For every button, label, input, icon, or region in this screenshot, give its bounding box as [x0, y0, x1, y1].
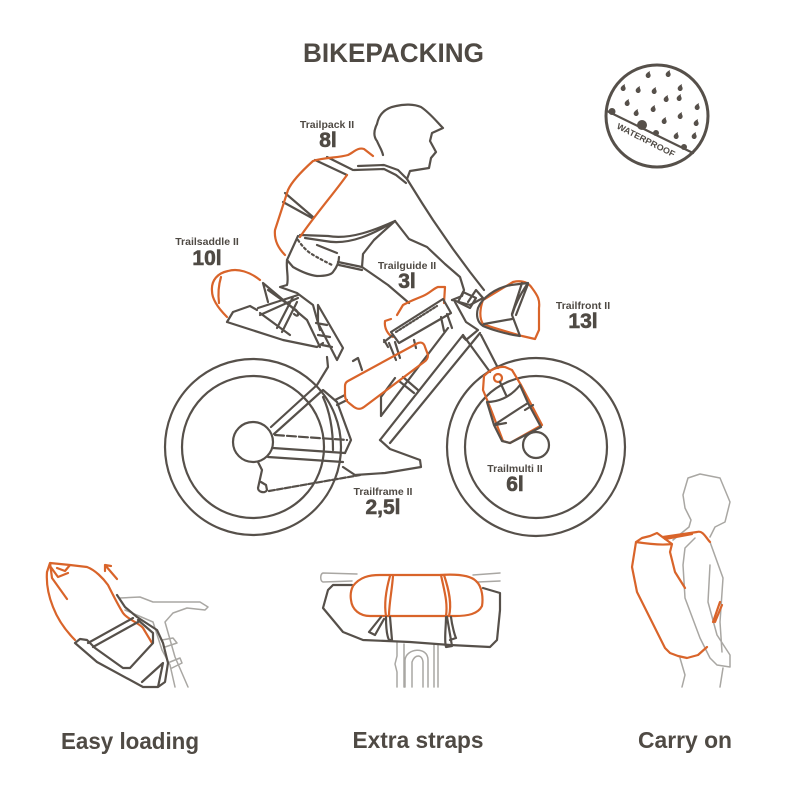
icon: waterproof badge	[606, 65, 708, 167]
label: Trailguide II: Trailguide II	[378, 260, 436, 272]
label: Trailmulti II	[487, 463, 543, 496]
bike	[165, 290, 625, 536]
label: Trailpack II	[300, 119, 354, 152]
label: Trailframe II: Trailframe II	[354, 486, 413, 498]
label: Trailframe II: 2,5l	[365, 496, 401, 519]
foot	[343, 440, 421, 475]
label: Trailmulti II: 6l	[506, 473, 524, 496]
label: Trailguide II: 3l	[398, 270, 416, 293]
caption: Carry on: Carry on	[638, 727, 732, 753]
caption: Extra straps: Extra straps	[352, 727, 484, 753]
label: Trailsaddle II	[175, 236, 239, 270]
panel: easy loading	[47, 563, 208, 687]
label: Trailmulti II: Trailmulti II	[487, 463, 543, 475]
label: Trailsaddle II: Trailsaddle II	[175, 236, 239, 248]
label: Trailfront II: 13l	[568, 310, 598, 333]
trailmulti bag	[483, 367, 542, 443]
panel: extra straps	[321, 573, 500, 687]
trailframe bag	[345, 343, 428, 409]
label: Trailpack II: Trailpack II	[300, 119, 354, 131]
caption: Easy loading: Easy loading	[61, 728, 199, 754]
label: Trailfront II	[556, 300, 610, 333]
rider	[280, 105, 484, 475]
trailguide bag	[384, 287, 452, 360]
panel: carry on	[632, 474, 730, 687]
trailfront bag	[458, 281, 539, 339]
trailsaddle bag	[212, 270, 343, 360]
trailpack bag	[275, 149, 373, 255]
label: Trailguide II	[378, 260, 436, 293]
icon: waterproof badge: WATERPROOF	[615, 121, 677, 159]
label: Trailframe II	[354, 486, 413, 519]
title: BIKEPACKING	[303, 38, 484, 68]
label: Trailsaddle II: 10l	[192, 247, 222, 270]
label: Trailpack II: 8l	[319, 129, 337, 152]
label: Trailfront II: Trailfront II	[556, 300, 610, 312]
